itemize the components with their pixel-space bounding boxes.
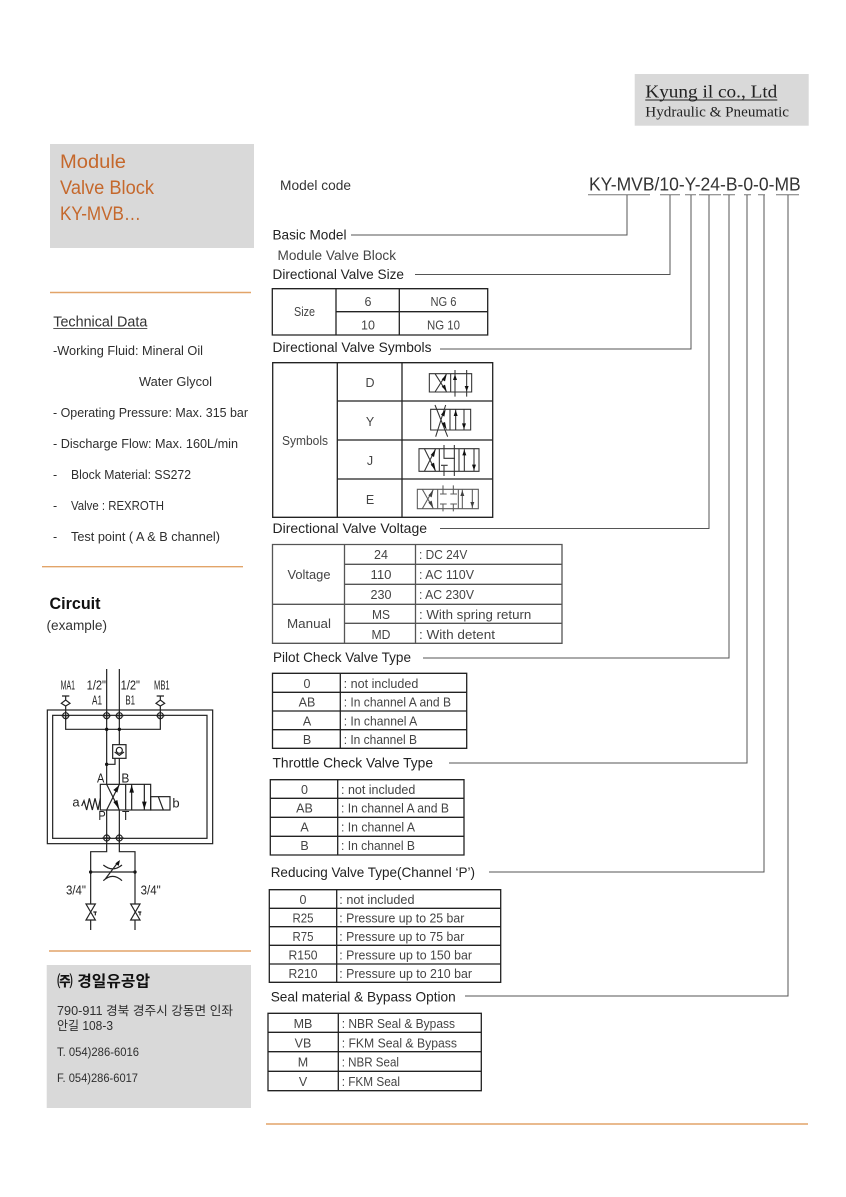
title panel: Module (60, 152, 126, 173)
model code string: KY-MVB/10-Y-24-B-0-0-MB (589, 175, 801, 195)
circuit heading (46, 594, 107, 633)
hydraulic circuit diagram: B (121, 770, 129, 785)
table: reducing valve: : Pressure up to 210 bar (339, 967, 472, 981)
hydraulic circuit diagram: b (172, 795, 180, 810)
table: throttle check valve: 0 (301, 783, 308, 797)
table: reducing valve: 0 (300, 893, 307, 907)
heading: directional valve symbols: Directional Valve Symbols (272, 339, 432, 355)
hydraulic circuit diagram: B1 (125, 693, 135, 708)
technical data text block: Technical Data (53, 314, 148, 330)
table: voltage: : AC 110V (419, 568, 475, 582)
icon: valve symbol J (419, 445, 479, 476)
circuit heading: (example) (46, 618, 107, 633)
table: voltage: : AC 230V (419, 588, 475, 602)
table: throttle check valve (270, 780, 464, 855)
company contact panel (47, 965, 251, 1108)
table: voltage: Voltage (288, 568, 331, 582)
hydraulic circuit diagram: MA1 (61, 677, 75, 692)
hydraulic circuit diagram: A (97, 770, 105, 785)
table: seal material: V (299, 1075, 308, 1089)
table: symbols: E (366, 493, 374, 507)
company header box: Hydraulic & Pneumatic (645, 105, 789, 121)
heading: directional valve voltage: Directional Valve Voltage (272, 520, 427, 536)
table: pilot check valve: B (303, 733, 311, 747)
hydraulic circuit diagram: 3/4" (141, 883, 161, 898)
technical data text block: Test point ( A & B channel) (71, 530, 220, 544)
title panel (50, 144, 254, 248)
table: voltage: : With detent (419, 628, 496, 642)
table: pilot check valve: : In channel B (344, 733, 417, 747)
hydraulic circuit diagram: 3/4" (66, 883, 86, 898)
table: size: 10 (361, 318, 375, 332)
table: throttle check valve: : In channel A and B (341, 802, 449, 816)
technical data text block: - Discharge Flow: Max. 160L/min (53, 437, 238, 451)
directional valve spool (82, 784, 170, 810)
heading: seal material and bypass option: Seal material & Bypass Option (271, 989, 456, 1005)
heading: reducing valve type: Reducing Valve Type(Channel ‘P’) (271, 864, 475, 880)
table: reducing valve: R150 (288, 948, 318, 962)
table: voltage: MD (372, 628, 390, 642)
table: pilot check valve: 0 (304, 677, 311, 691)
leader line: throttle check (449, 195, 747, 763)
table: size: Size (294, 305, 315, 319)
leader line: valve size (415, 195, 670, 274)
leader line: pilot check (423, 195, 729, 658)
table: voltage: : With spring return (419, 608, 531, 622)
table: voltage: Manual (287, 617, 331, 631)
title panel: KY-MVB… (60, 204, 141, 225)
technical data text block: - (53, 499, 57, 513)
table: seal material: MB (294, 1017, 312, 1031)
table: seal material: : NBR Seal & Bypass (342, 1017, 455, 1031)
table: throttle check valve: : not included (341, 783, 415, 797)
leader line: seal material (465, 195, 788, 996)
table: seal material: : NBR Seal (342, 1056, 399, 1070)
leader line: valve symbols (440, 195, 691, 349)
table: seal material: M (298, 1056, 308, 1070)
company header box: Kyung il co., Ltd (645, 82, 777, 102)
table: throttle check valve: : In channel A (341, 820, 416, 834)
table: seal material: VB (295, 1036, 311, 1050)
table: pilot check valve: : In channel A and B (344, 696, 451, 710)
table: seal material (268, 1013, 481, 1091)
table: reducing valve: : Pressure up to 25 bar (339, 912, 464, 926)
table: reducing valve: : Pressure up to 150 bar (339, 948, 472, 962)
table: symbols: D (365, 376, 375, 390)
table: throttle check valve: A (300, 820, 309, 834)
table: size: NG 10 (427, 318, 460, 332)
heading: basic model (272, 226, 396, 263)
table: voltage: 230 (370, 588, 392, 602)
table: throttle check valve: B (300, 839, 309, 853)
table: reducing valve: : not included (339, 893, 415, 907)
table: size: 6 (365, 295, 372, 309)
heading: throttle check valve type: Throttle Check Valve Type (272, 755, 433, 771)
technical data text block: Block Material: SS272 (71, 468, 191, 482)
table: throttle check valve: : In channel B (341, 839, 415, 853)
company contact panel: 안길 108-3 (57, 1019, 113, 1033)
icon: valve symbol Y (431, 405, 471, 437)
table: voltage (272, 544, 562, 643)
table: pilot check valve: : In channel A (344, 714, 418, 728)
table: symbols (273, 363, 493, 517)
heading: basic model: Basic Model (272, 226, 346, 242)
table: pilot check valve: : not included (344, 677, 418, 691)
technical data text block: - Operating Pressure: Max. 315 bar (53, 406, 248, 420)
company header box (635, 74, 809, 126)
gauge port MB1 symbol (156, 696, 165, 713)
company contact panel: ㈜ 경일유공압 (57, 972, 150, 990)
table: seal material: : FKM Seal & Bypass (342, 1036, 457, 1050)
table: reducing valve: R210 (288, 967, 318, 981)
table: pilot check valve: A (303, 714, 312, 728)
table: reducing valve: R25 (292, 912, 314, 926)
model code label: Model code (280, 178, 351, 193)
table: symbols: J (367, 454, 373, 468)
table: voltage: MS (372, 608, 390, 622)
hydraulic circuit diagram: a (72, 795, 80, 810)
hydraulic circuit diagram: 1/2" (121, 677, 140, 692)
table: reducing valve: : Pressure up to 75 bar (339, 930, 464, 944)
hydraulic circuit diagram (47, 669, 213, 930)
technical data text block (53, 314, 248, 544)
table: voltage: 110 (370, 568, 392, 582)
hydraulic circuit diagram: MB1 (154, 677, 170, 692)
company contact panel: F. 054)286-6017 (57, 1073, 138, 1085)
technical data text block: Water Glycol (139, 375, 212, 389)
hydraulic circuit diagram: A1 (92, 693, 102, 708)
icon: valve symbol D (429, 370, 472, 397)
company contact panel: T. 054)286-6016 (57, 1047, 139, 1059)
heading: directional valve size: Directional Valve Size (272, 266, 404, 282)
table: voltage: 24 (374, 548, 388, 562)
gauge port MA1 symbol (61, 696, 70, 713)
technical data text block: - (53, 468, 57, 482)
hydraulic circuit diagram: 1/2" (87, 677, 106, 692)
company contact panel: 790-911 경북 경주시 강동면 인좌 (57, 1004, 234, 1018)
table: symbols: Y (366, 415, 375, 429)
circuit heading: Circuit (50, 594, 101, 613)
table: reducing valve (269, 890, 501, 982)
table: throttle check valve: AB (296, 802, 313, 816)
technical data text block: - (53, 530, 57, 544)
table: size: NG 6 (430, 295, 457, 309)
hydraulic circuit diagram: P (98, 808, 106, 823)
table: pilot check valve: AB (299, 696, 315, 710)
technical data text block: Valve : REXROTH (71, 499, 164, 513)
icon: valve symbol E (417, 485, 478, 511)
hydraulic circuit diagram: T (122, 808, 129, 823)
table: voltage: : DC 24V (419, 548, 468, 562)
table: symbols: Symbols (282, 434, 328, 448)
leader line: reducing valve (489, 195, 764, 872)
technical data text block: -Working Fluid: Mineral Oil (53, 344, 203, 358)
table: pilot check valve (272, 673, 467, 748)
heading: pilot check valve type: Pilot Check Valve Type (273, 649, 411, 665)
leader line: valve voltage (440, 195, 709, 528)
table: size (272, 289, 488, 335)
title panel: Valve Block (60, 178, 154, 199)
leader line: basic model (351, 195, 627, 235)
pilot check valve (107, 745, 126, 764)
heading: basic model: Module Valve Block (278, 248, 396, 263)
table: seal material: : FKM Seal (342, 1075, 400, 1089)
table: reducing valve: R75 (292, 930, 314, 944)
